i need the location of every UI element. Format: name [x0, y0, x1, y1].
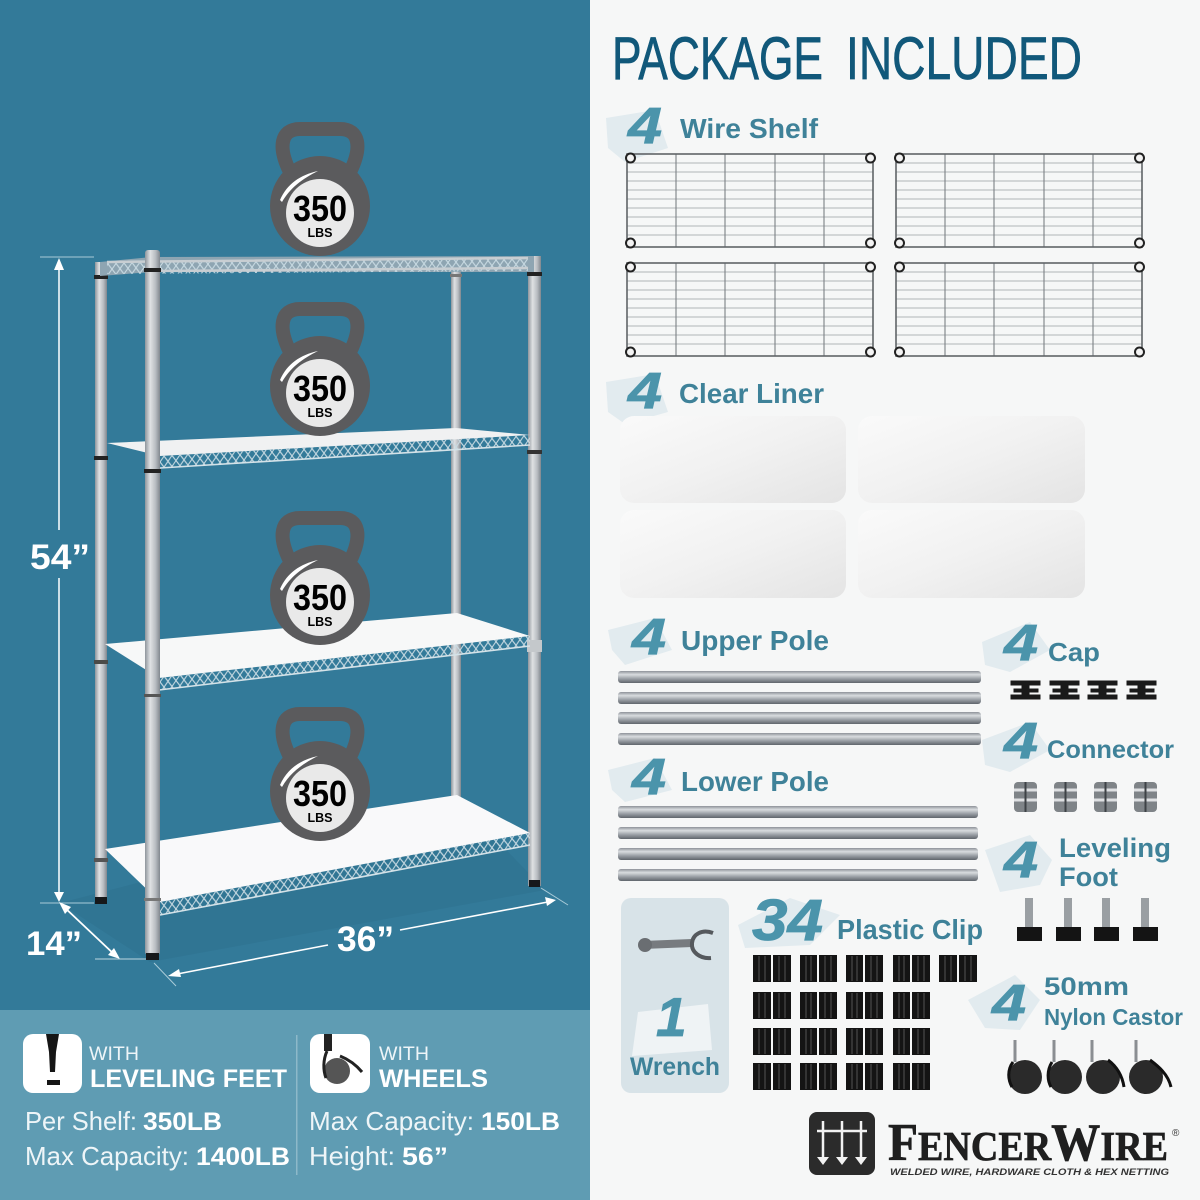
clear liners [620, 416, 1085, 598]
wheels specs: Max Capacity: [309, 1106, 474, 1136]
caps [1011, 681, 1156, 699]
wire shelf 4 [895, 262, 1144, 356]
title: PACKAGE [612, 25, 823, 92]
leveling feet specs: 350LB [143, 1108, 222, 1136]
kettlebell 3: 350 [293, 577, 347, 618]
registered mark: ® [1172, 1128, 1180, 1139]
item: wire shelf heading [606, 97, 819, 162]
item: wire shelf heading: Wire Shelf [680, 113, 819, 144]
panel: configuration specs [0, 1010, 590, 1200]
item: wire shelf heading: 4 [627, 97, 662, 154]
kettlebell 2: 350 [293, 368, 347, 409]
item: upper pole heading: Upper Pole [681, 625, 829, 656]
item: connector heading [982, 712, 1174, 772]
panel: wrench: 1 [656, 986, 687, 1048]
top wire shelf [100, 256, 534, 276]
icon: leveling foot [23, 1034, 82, 1093]
upper poles [618, 671, 981, 745]
dimension: depth 14 inches [26, 902, 146, 963]
dimension: height 54 inches: 54” [30, 538, 90, 577]
item: nylon castor heading: 4 [991, 974, 1026, 1031]
kettlebell 1 [270, 129, 370, 256]
panel: product dimensions [0, 0, 590, 1010]
plastic clips [753, 955, 977, 1090]
kettlebell 2: LBS [308, 405, 333, 420]
item: nylon castor heading: 50mm [1044, 973, 1129, 1001]
leveling feet specs: Per Shelf: [25, 1106, 137, 1136]
wheels heading [379, 1044, 488, 1093]
connectors [1014, 782, 1157, 812]
leveling feet [1017, 898, 1158, 941]
wire shelf 2 [895, 154, 1144, 248]
castors [1008, 1040, 1171, 1094]
kettlebell 2 [270, 309, 370, 436]
kettlebell 3: LBS [308, 614, 333, 629]
third shelf with liner [105, 613, 530, 690]
icon: wheel [310, 1034, 370, 1093]
item: clear liner heading [606, 362, 824, 424]
shelf rack [94, 250, 542, 960]
item: upper pole heading [608, 608, 829, 665]
dimension: depth 14 inches: 14” [26, 925, 82, 963]
item: lower pole heading: Lower Pole [681, 766, 829, 797]
item: lower pole heading [608, 748, 829, 805]
wire shelves [626, 154, 1144, 356]
item: clear liner heading: 4 [627, 362, 662, 419]
brand name: FENCERWIRE [888, 1114, 1168, 1172]
wire shelf 1 [626, 154, 875, 248]
wheels specs [309, 1106, 560, 1171]
leveling feet specs: 1400LB [196, 1143, 290, 1171]
item: connector heading: Connector [1047, 736, 1174, 764]
item: plastic clip heading: 34 [752, 888, 823, 953]
clip row 2 [753, 992, 930, 1019]
item: clear liner heading: Clear Liner [679, 378, 824, 409]
leveling feet heading: LEVELING FEET [90, 1065, 287, 1093]
logo: FencerWire [809, 1112, 1180, 1177]
item: plastic clip heading: Plastic Clip [837, 914, 983, 945]
leveling feet heading [89, 1044, 287, 1093]
clip row 4 [753, 1063, 930, 1090]
kettlebell 4 [270, 714, 370, 841]
second shelf with liner [107, 428, 530, 468]
item: plastic clip heading [738, 888, 983, 953]
tagline: WELDED WIRE, HARDWARE CLOTH & HEX NETTING [890, 1167, 1169, 1177]
title: INCLUDED [846, 25, 1082, 92]
item: cap heading: Cap [1048, 637, 1100, 667]
item: cap heading [982, 614, 1100, 672]
kettlebell 3 [270, 518, 370, 645]
bottom shelf with liner [105, 795, 530, 915]
wheels specs: Height: [309, 1141, 395, 1171]
icon: wrench [638, 932, 713, 958]
dimension: width 36 inches [154, 888, 568, 986]
wheels heading: WHEELS [379, 1065, 488, 1093]
wheels specs: 150LB [481, 1108, 560, 1136]
item: leveling foot heading: Foot [1059, 862, 1118, 892]
kettlebell 4: 350 [293, 773, 347, 814]
item: nylon castor heading [968, 973, 1183, 1031]
wire shelf 3 [626, 262, 875, 356]
leveling feet specs [25, 1106, 290, 1171]
item: leveling foot heading [985, 831, 1171, 892]
dimension: width 36 inches: 36” [337, 920, 394, 959]
wheels heading: WITH [379, 1044, 429, 1065]
kettlebell 4: LBS [308, 810, 333, 825]
item: nylon castor heading: Nylon Castor [1044, 1004, 1183, 1030]
item: connector heading: 4 [1003, 712, 1038, 769]
title [612, 25, 1082, 92]
item: cap heading: 4 [1003, 614, 1038, 671]
kettlebell 1: 350 [293, 188, 347, 229]
clip row 1 [753, 955, 977, 982]
panel: wrench [621, 898, 729, 1093]
lower poles [618, 806, 978, 881]
leveling feet specs: Max Capacity: [25, 1141, 189, 1171]
leveling feet heading: WITH [89, 1044, 139, 1065]
item: leveling foot heading: Leveling [1059, 833, 1171, 863]
dimension: height 54 inches [30, 257, 94, 903]
item: upper pole heading: 4 [631, 608, 666, 665]
clip row 3 [753, 1028, 930, 1055]
wheels specs: 56” [402, 1143, 448, 1171]
logo mark [809, 1112, 875, 1175]
kettlebell 1: LBS [308, 225, 333, 240]
item: lower pole heading: 4 [631, 748, 666, 805]
panel: wrench: Wrench [630, 1053, 720, 1081]
item: leveling foot heading: 4 [1003, 831, 1038, 888]
